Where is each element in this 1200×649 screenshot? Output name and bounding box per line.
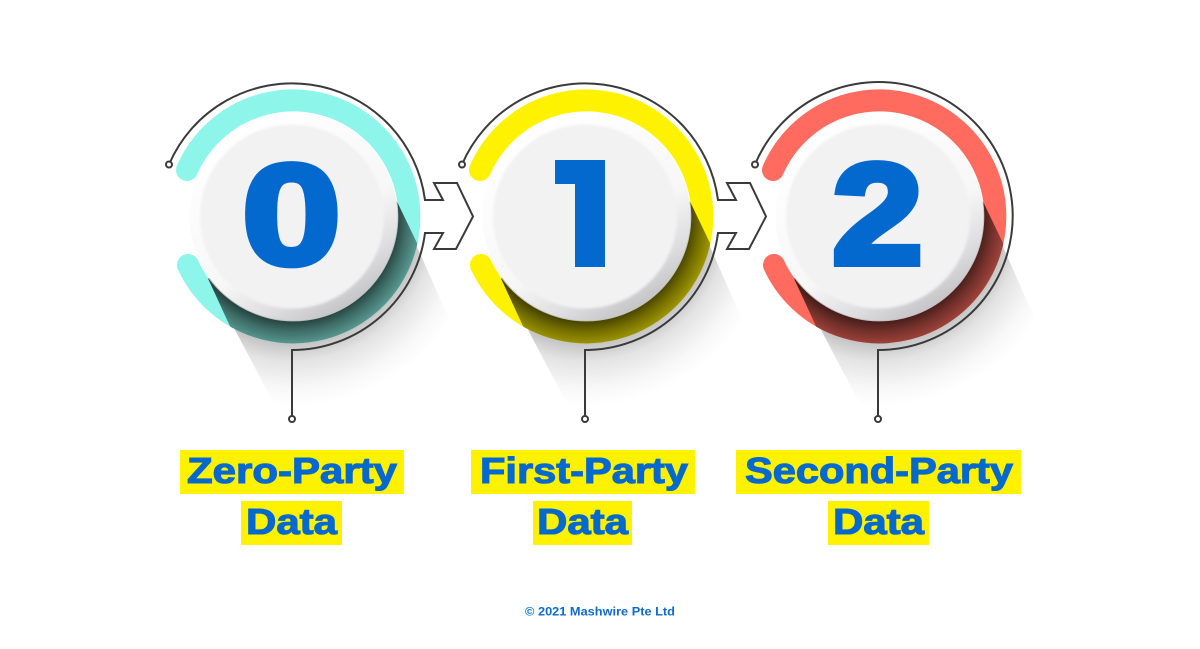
panel: step 2 [751, 81, 1026, 423]
start node [166, 162, 172, 168]
label: Zero-Party Data: Data [246, 501, 338, 542]
label: Zero-Party Data [180, 450, 404, 545]
ring shadow [208, 202, 418, 344]
number 1: 1 [503, 118, 677, 303]
long drop shadow [794, 202, 1056, 486]
turquoise ring [187, 100, 409, 332]
panel: step 1 [458, 82, 768, 423]
end node [875, 416, 881, 422]
disc face [200, 124, 384, 308]
end node [582, 416, 588, 422]
label: Zero-Party Data: Zero-Party [187, 450, 397, 491]
long drop shadow [208, 202, 470, 486]
connector line with arrow [462, 83, 766, 419]
ring shadow [794, 202, 1004, 344]
label: First-Party Data: First-Party [480, 450, 688, 491]
label: Second-Party Data: Second-Party [745, 450, 1013, 491]
disc rim [190, 112, 398, 320]
label: Second-Party Data [736, 450, 1021, 545]
disc face [786, 124, 970, 308]
connector line [755, 82, 1013, 419]
label: Second-Party Data: Data [833, 501, 925, 542]
number 1 [555, 160, 605, 267]
number 0: 0 [242, 135, 341, 295]
disc face [493, 124, 677, 308]
label: First-Party Data: Data [537, 501, 629, 542]
panel: step 0 [165, 82, 474, 423]
start node [752, 162, 758, 168]
number 2: 2 [832, 135, 923, 294]
disc rim [482, 112, 690, 320]
disc rim [776, 112, 984, 320]
yellow ring [480, 100, 702, 332]
start node [459, 162, 465, 168]
long drop shadow [501, 202, 763, 486]
end node [289, 416, 295, 422]
ring shadow [501, 202, 710, 344]
footer copyright: © 2021 Mashwire Pte Ltd [525, 606, 675, 618]
connector line with arrow [169, 83, 473, 419]
label: First-Party Data [471, 450, 695, 545]
coral ring [773, 100, 995, 332]
